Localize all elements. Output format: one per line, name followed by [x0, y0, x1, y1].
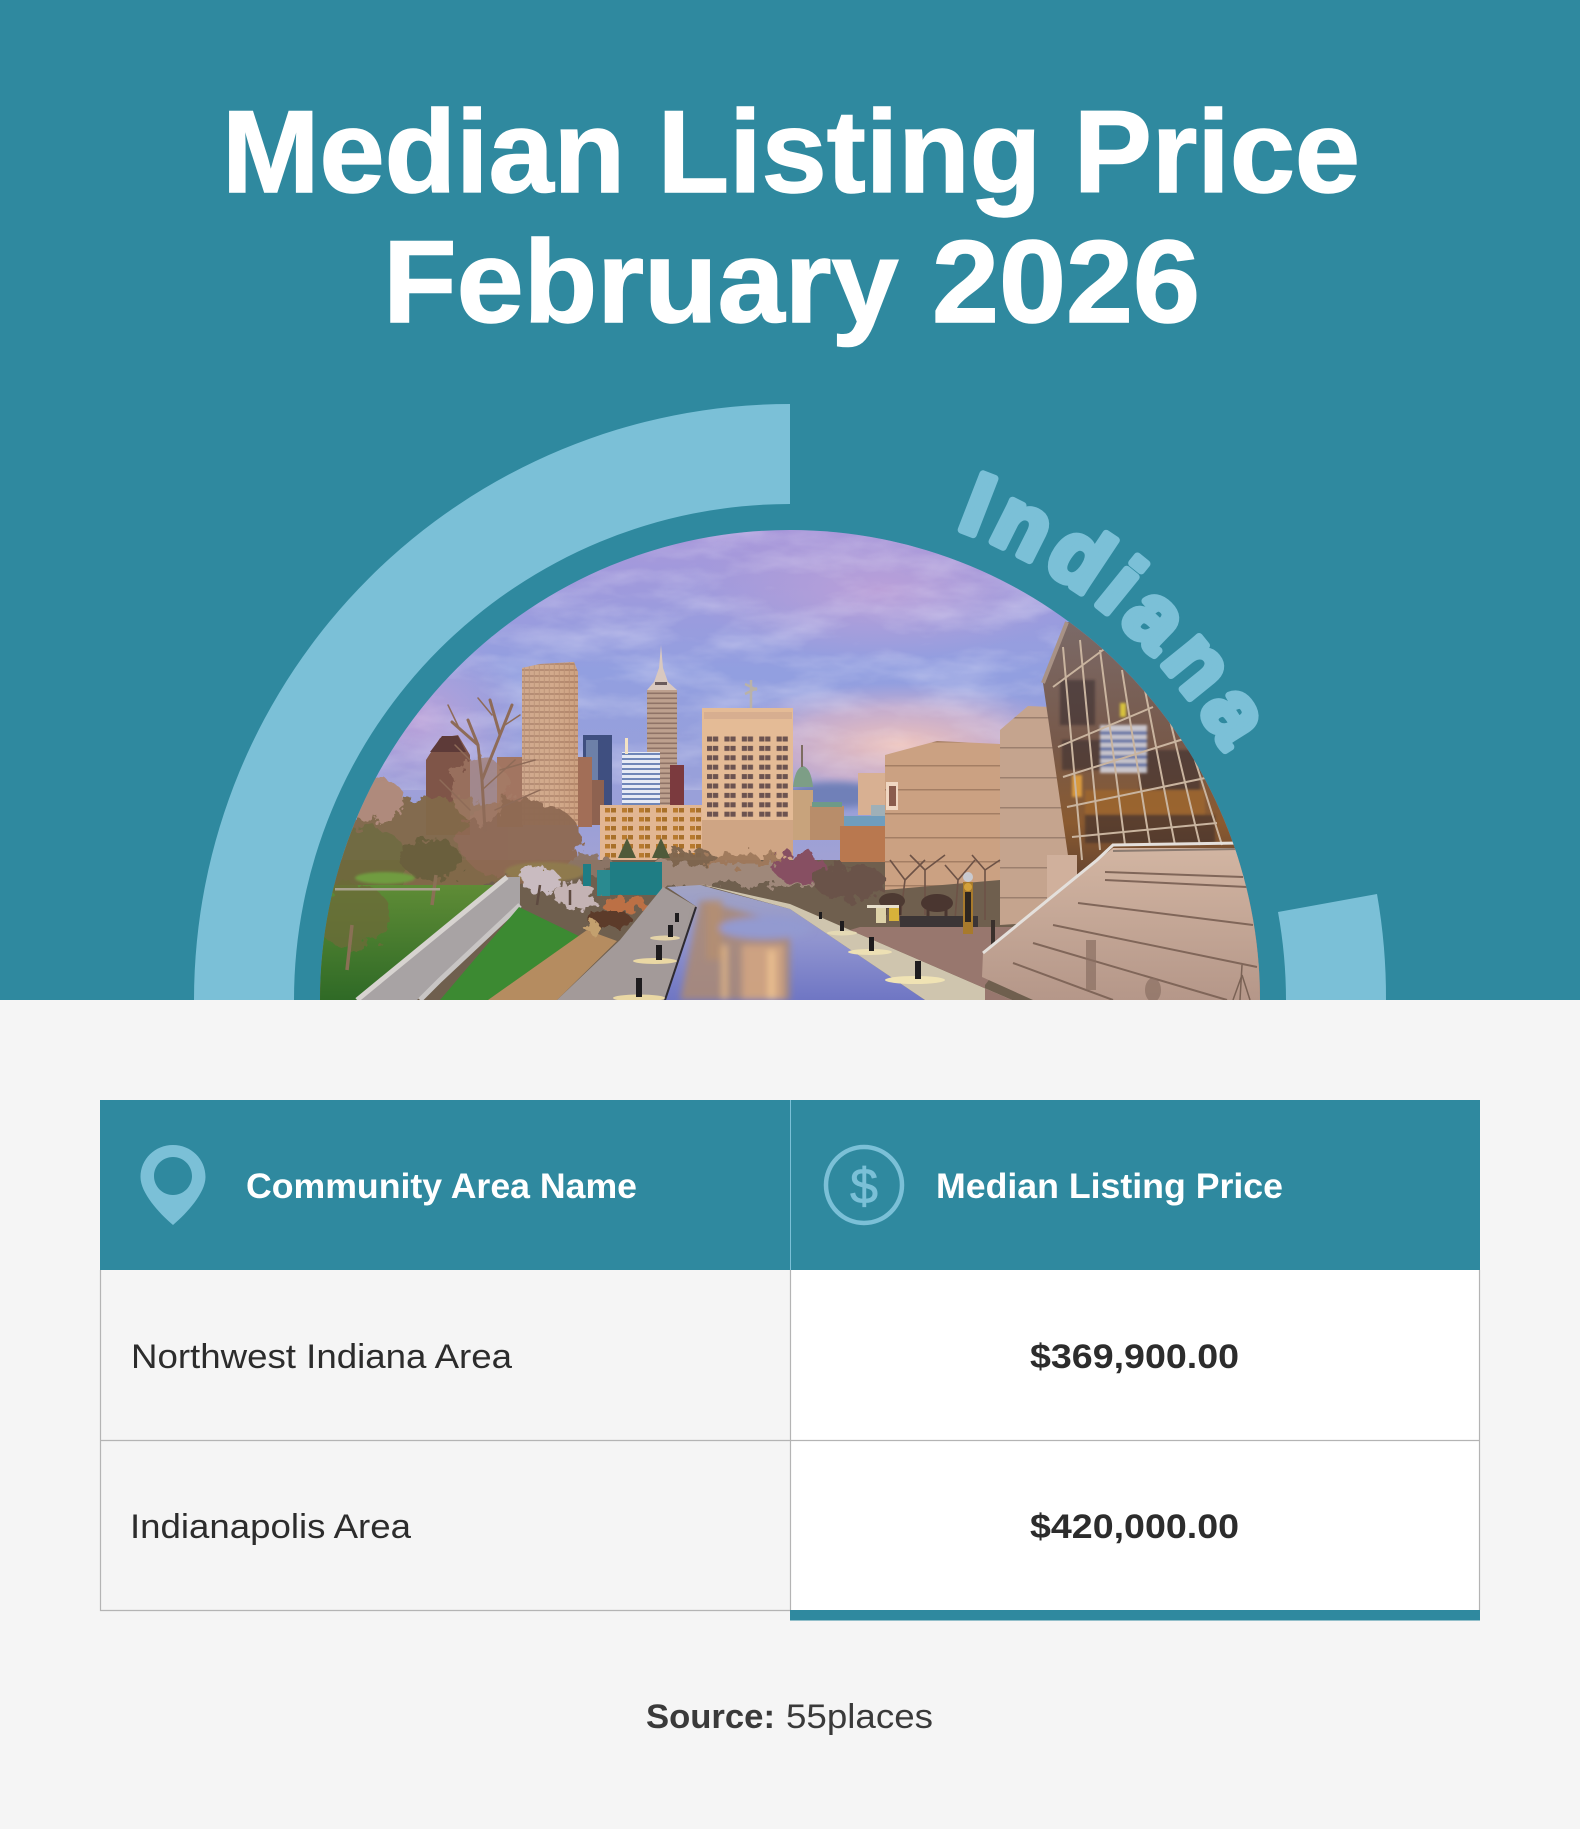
row 1 name: Northwest Indiana Area: [131, 1338, 512, 1376]
table bottom accent bar: [790, 1610, 1480, 1620]
museum tower: [1000, 706, 1075, 925]
title: Median Listing Price: [222, 86, 1360, 217]
source note: 55places: [786, 1698, 933, 1736]
row 2 price: $420,000.00: [1030, 1508, 1239, 1546]
canal promenade right: [700, 884, 1012, 1000]
source note: Source:: [646, 1698, 775, 1736]
pedestrian: [990, 920, 995, 945]
title: February 2026: [383, 216, 1200, 347]
table right column background: [790, 1270, 1480, 1610]
icon: location pin: [140, 1145, 206, 1225]
ornamental clock: [963, 872, 973, 934]
glass atrium: [1041, 621, 1236, 874]
left lawn: [320, 885, 493, 1000]
curved state label: Indiana: Indiana: [958, 470, 1259, 754]
table header band: [100, 1100, 1480, 1270]
shrubs: [583, 897, 649, 932]
panel: teal header: [0, 0, 1580, 1000]
ramp walkway: [357, 877, 520, 1000]
distant buildings: [426, 645, 886, 862]
icon: dollar coin: [826, 1147, 902, 1223]
decorative ring arc: right segment: [1278, 894, 1386, 1000]
office block with dark windows: [702, 680, 793, 860]
center lawn: [440, 907, 587, 1000]
decorative ring arc: left segment: [194, 404, 790, 1000]
panel: data table: [100, 1100, 1480, 1620]
canal promenade left: [557, 887, 697, 1000]
autumn tree mass: [320, 758, 820, 903]
ground base under park and canal: [320, 860, 1260, 1000]
small concrete block: [1047, 855, 1077, 898]
bollards with lights: [613, 912, 945, 1002]
title: [222, 86, 1360, 347]
sky: [310, 520, 1260, 1000]
bare tree branches: [440, 698, 540, 830]
tower with faceted beige windows: [522, 662, 578, 825]
low building with amber windows: [600, 805, 702, 860]
row 1 price: $369,900.00: [1030, 1338, 1239, 1376]
header label: median listing price: Median Listing Price: [936, 1167, 1283, 1206]
conifer shrubs: [618, 838, 670, 858]
canal water with reflections: [664, 885, 925, 1000]
ornamental dry grass: [488, 930, 617, 1000]
source note: [646, 1698, 933, 1736]
header column divider: [790, 1100, 791, 1270]
teal sculpture wall: [583, 862, 662, 896]
row 2 name: Indianapolis Area: [130, 1508, 411, 1546]
green trees on lawn: [314, 840, 585, 970]
table grid lines: [100, 1270, 1480, 1610]
plaza: [850, 927, 1030, 1000]
concrete stepped base: [982, 843, 1280, 1002]
beige museum building: [885, 741, 1000, 890]
photo: Indianapolis canal skyline in half circle: [300, 520, 1280, 1002]
header label: community area name: Community Area Name: [246, 1167, 637, 1206]
tree line and sculptures: [774, 852, 1000, 927]
blossom trees: [520, 867, 597, 908]
icon: dollar coin: $: [850, 1158, 878, 1214]
